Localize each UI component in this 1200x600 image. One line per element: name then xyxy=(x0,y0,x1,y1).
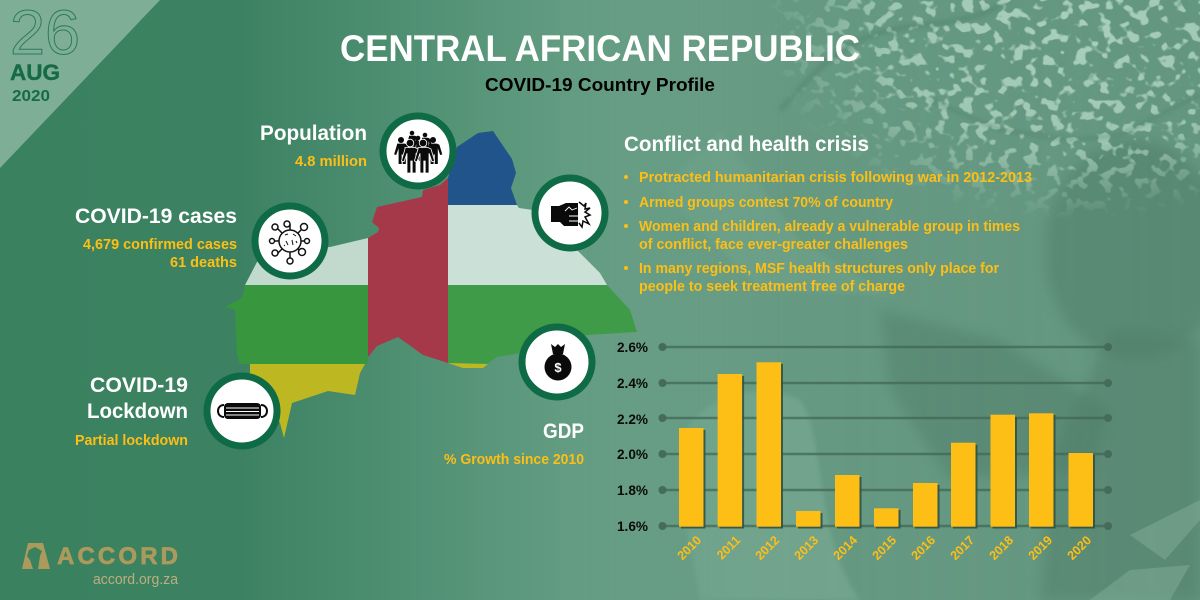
lockdown heading line 2: Lockdown xyxy=(87,400,188,423)
bullet list: Women and children, already a vulnerable group in times xyxy=(639,219,1020,235)
x axis year labels: 2010 xyxy=(675,533,704,563)
logo mark xyxy=(22,543,50,569)
x axis year labels: 2019 xyxy=(1026,533,1055,563)
population value: 4.8 million xyxy=(295,154,367,170)
chart grid and y axis: 1.6% xyxy=(617,518,649,534)
chart grid and y axis xyxy=(617,339,1112,534)
population block xyxy=(260,122,367,170)
gdp subheading: % Growth since 2010 xyxy=(444,452,584,468)
x axis year labels: 2012 xyxy=(753,533,782,563)
bars xyxy=(679,362,1093,527)
map: red band xyxy=(368,178,448,363)
chart grid and y axis: 1.8% xyxy=(617,482,649,498)
chart grid and y axis: 2.2% xyxy=(617,411,649,427)
lockdown heading line 1: COVID-19 xyxy=(90,374,188,397)
date: day: 26 xyxy=(10,0,80,68)
date: year: 2020 xyxy=(12,88,50,105)
map: yellow band right xyxy=(448,363,488,368)
lockdown block xyxy=(75,374,188,449)
title: CENTRAL AFRICAN REPUBLIC xyxy=(340,28,860,69)
bullet list: Protracted humanitarian crisis following war in 2012-2013 xyxy=(639,170,1032,186)
bullet list xyxy=(624,170,1032,295)
map: yellow band left xyxy=(250,364,365,438)
chart grid and y axis: 2.0% xyxy=(617,446,649,462)
map: white band right xyxy=(448,205,607,285)
x axis year labels: 2018 xyxy=(987,533,1016,563)
confirmed cases: 4,679 confirmed cases xyxy=(83,237,237,253)
x axis year labels: 2015 xyxy=(870,533,899,563)
x axis year labels: 2013 xyxy=(792,533,821,563)
x axis year labels xyxy=(675,533,1094,563)
deaths: 61 deaths xyxy=(170,255,237,271)
bullet list: Armed groups contest 70% of country xyxy=(639,195,893,211)
subtitle: COVID-19 Country Profile xyxy=(485,74,715,95)
x axis year labels: 2011 xyxy=(714,533,743,562)
covid cases heading: COVID-19 cases xyxy=(75,205,237,228)
chart grid and y axis: 2.6% xyxy=(617,339,649,355)
icon: money bag: $ xyxy=(554,360,562,375)
icon: virus xyxy=(255,206,325,276)
lockdown status: Partial lockdown xyxy=(75,433,188,449)
corner date banner xyxy=(0,0,160,168)
logo: ACCORD xyxy=(22,543,179,588)
bar chart: GDP growth xyxy=(617,339,1112,563)
map: green band left xyxy=(225,285,368,364)
bullet list: people to seek treatment free of charge xyxy=(639,279,905,295)
map: country in flag colours xyxy=(225,131,637,438)
bullet list: In many regions, MSF health structures only place for xyxy=(639,261,999,277)
gdp heading: GDP xyxy=(543,420,584,443)
bar shadows xyxy=(681,364,1095,528)
x axis year labels: 2017 xyxy=(948,533,977,563)
gdp block xyxy=(444,420,584,468)
x axis year labels: 2016 xyxy=(909,533,938,563)
icon: people xyxy=(383,116,453,186)
x axis year labels: 2020 xyxy=(1065,533,1094,563)
map: green band right xyxy=(448,285,637,366)
icon: fist xyxy=(535,178,605,248)
icon: money bag xyxy=(522,327,592,397)
logo url: accord.org.za xyxy=(93,572,179,588)
map: blue band xyxy=(448,131,517,205)
background photo: soldiers under trees xyxy=(710,0,1200,600)
logo wordmark: ACCORD xyxy=(57,543,178,570)
bullet list: of conflict, face ever-greater challenges xyxy=(639,237,908,253)
x axis year labels: 2014 xyxy=(831,533,860,563)
covid cases block xyxy=(75,205,237,271)
date: month: AUG xyxy=(10,60,60,85)
map: white band left xyxy=(245,238,368,285)
chart grid and y axis: 2.4% xyxy=(617,375,649,391)
panel heading: Conflict and health crisis xyxy=(624,133,869,156)
panel: conflict and health crisis xyxy=(624,133,1032,295)
population heading: Population xyxy=(260,122,367,145)
icon: face mask xyxy=(207,376,277,446)
